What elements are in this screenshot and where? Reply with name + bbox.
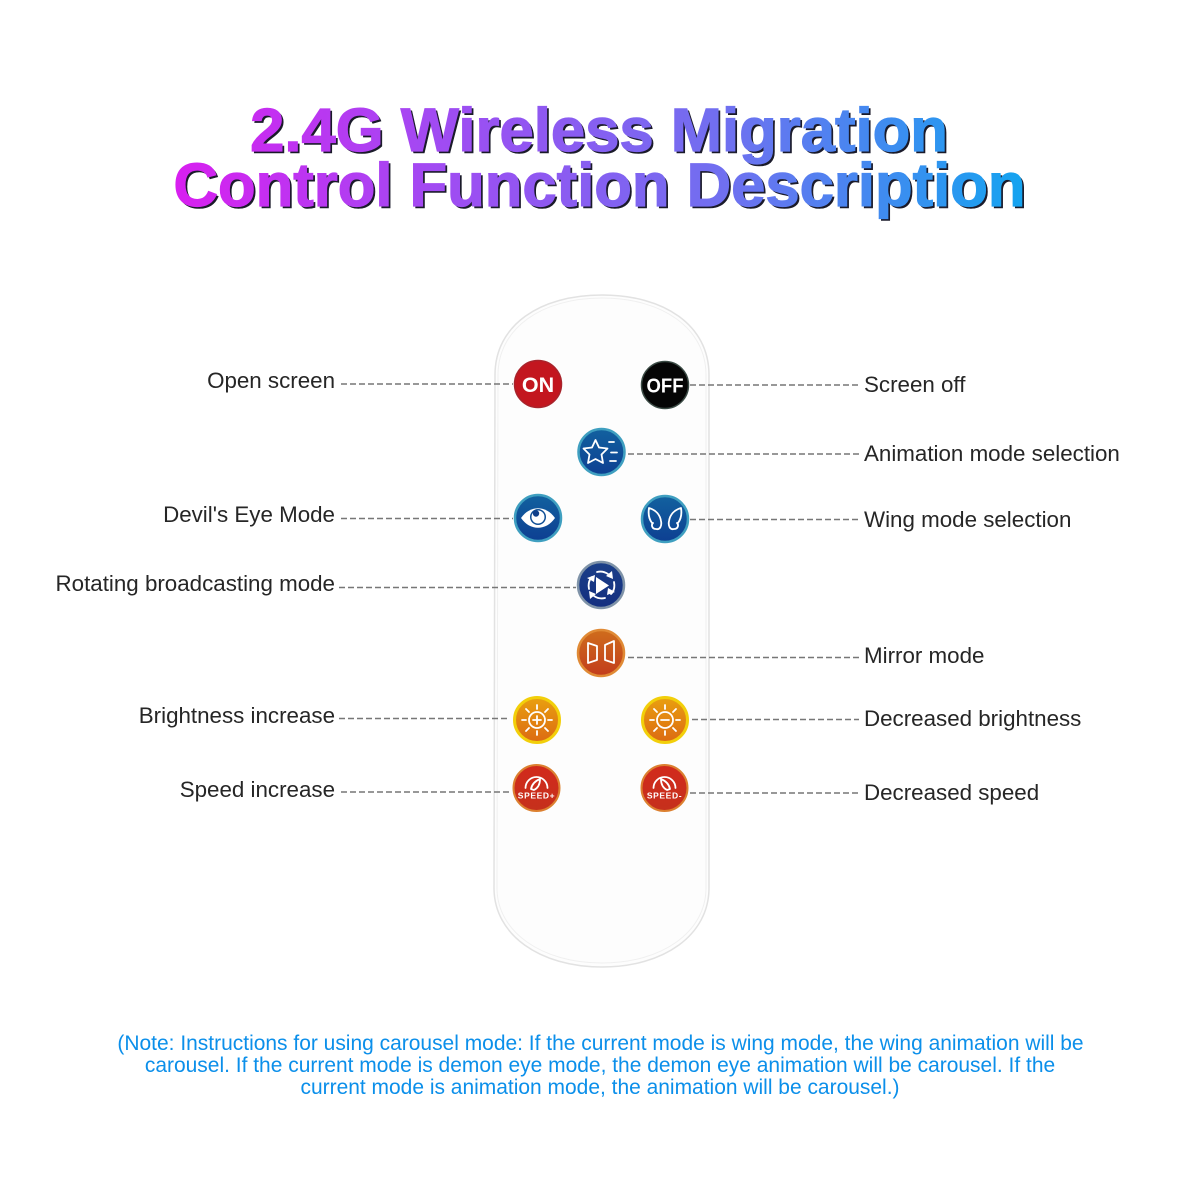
title: 2.4G Wireless Migration — [250, 96, 948, 165]
title — [174, 96, 1028, 222]
note text: current mode is animation mode, the animation will be carousel.) — [300, 1076, 900, 1099]
label: decreased brightness: Decreased brightness — [864, 706, 1081, 731]
button: speed increase — [514, 765, 560, 811]
button: devil's eye — [515, 495, 561, 541]
button: ON — [514, 360, 562, 408]
button: ON: ON — [522, 373, 554, 397]
title: Control Function Description — [174, 151, 1026, 220]
button: speed decrease — [642, 765, 688, 811]
note text: (Note: Instructions for using carousel mode: If the current mode is wing mode, the wing animation will be — [117, 1032, 1084, 1055]
button: speed decrease: SPEED- — [647, 790, 682, 800]
label: open screen: Open screen — [207, 368, 335, 393]
label: devil's eye mode: Devil's Eye Mode — [163, 502, 335, 527]
button: wing mode — [642, 496, 688, 542]
button: brightness decrease — [642, 698, 688, 742]
label: decreased speed: Decreased speed — [864, 780, 1039, 805]
note text — [117, 1032, 1084, 1099]
button: OFF — [642, 362, 688, 408]
label: speed increase: Speed increase — [180, 777, 335, 802]
label: mirror mode: Mirror mode — [864, 643, 984, 668]
title: Control Function Description — [176, 153, 1028, 222]
title: 2.4G Wireless Migration — [252, 98, 950, 167]
button: rotating broadcast — [578, 562, 624, 608]
button: speed increase: SPEED+ — [518, 790, 555, 800]
label: brightness increase: Brightness increase — [139, 703, 335, 728]
button: animation star — [578, 429, 624, 475]
button: OFF: OFF — [646, 374, 684, 398]
label: animation mode selection: Animation mode selection — [864, 441, 1120, 466]
remote control body — [494, 295, 709, 967]
label: rotating broadcasting mode: Rotating broadcasting mode — [56, 571, 335, 596]
note text: carousel. If the current mode is demon eye mode, the demon eye animation will be carousel. If the — [145, 1054, 1055, 1077]
button: brightness increase — [514, 698, 560, 742]
button: mirror mode — [578, 630, 624, 676]
label: screen off: Screen off — [864, 372, 966, 397]
label: wing mode selection: Wing mode selection — [864, 507, 1071, 532]
